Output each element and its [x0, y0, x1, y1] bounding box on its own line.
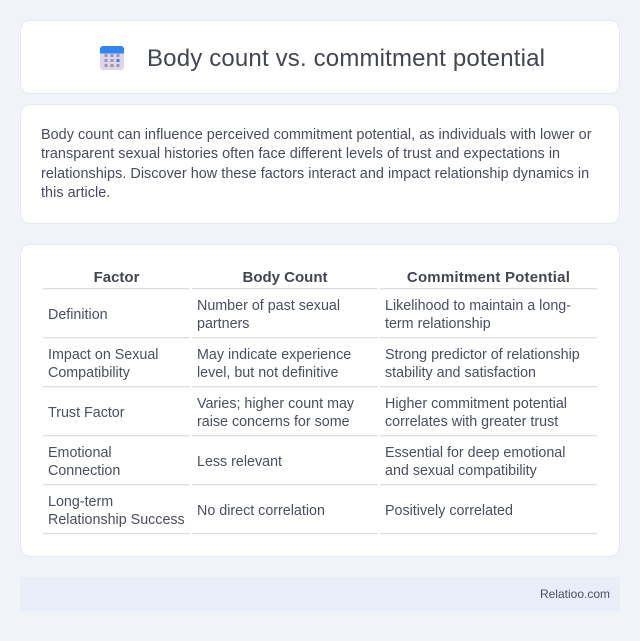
row: Definition: Number of past sexual [197, 298, 340, 314]
intro text [41, 127, 592, 201]
row: Emotional Connection: Essential for deep emotional [385, 445, 565, 461]
row: Impact on Sexual Compatibility: level, but not definitive [197, 365, 338, 381]
row: Trust Factor: raise concerns for some [197, 414, 350, 430]
row: Definition: partners [197, 316, 249, 332]
panel: intro: this article. [41, 185, 110, 201]
row: Definition: Definition [48, 307, 108, 323]
row: Long-term Relationship Success: No direct correlation [197, 503, 325, 519]
header: Body Count: Body Count [242, 269, 327, 286]
panel: comparison table [20, 244, 620, 557]
row: Trust Factor: Trust Factor [48, 405, 125, 421]
row: Emotional Connection: Less relevant [197, 454, 282, 470]
icon: calendar [100, 46, 124, 70]
row: Trust Factor: correlates with greater trust [385, 414, 558, 430]
panel: intro: relationships. Discover how these factors interact and impact relationship dynamics in [41, 166, 589, 182]
footer bar [20, 577, 620, 611]
row: Trust Factor [48, 396, 567, 430]
row: Impact on Sexual Compatibility [48, 347, 580, 381]
row: Trust Factor: Higher commitment potential [385, 396, 567, 412]
row: Long-term Relationship Success: Long-term [48, 494, 113, 510]
row: Impact on Sexual Compatibility: May indicate experience [197, 347, 351, 363]
row: Emotional Connection: and sexual compatibility [385, 463, 537, 479]
panel: intro: transparent sexual histories often face different levels of trust and expectations in [41, 146, 560, 162]
header: Factor: Factor [94, 269, 139, 286]
row: Definition: Likelihood to maintain a long- [385, 298, 571, 314]
panel: title card [20, 20, 620, 94]
panel: intro: Body count can influence perceived commitment potential, as individuals with lower or [41, 127, 592, 143]
row: Emotional Connection [48, 445, 565, 479]
row: Impact on Sexual Compatibility: Impact on Sexual [48, 347, 158, 363]
title: Body count vs. commitment potential [147, 45, 545, 72]
footer text: Relatioo.com [540, 587, 610, 601]
row: Definition [48, 298, 571, 332]
row: Impact on Sexual Compatibility: stability and satisfaction [385, 365, 536, 381]
row: Long-term Relationship Success [48, 494, 513, 528]
header: Commitment Potential: Commitment Potential [407, 269, 570, 286]
row: Impact on Sexual Compatibility: Compatibility [48, 365, 130, 381]
row: Definition: term relationship [385, 316, 491, 332]
row: Trust Factor: Varies; higher count may [197, 396, 354, 412]
row: Long-term Relationship Success: Relationship Success [48, 512, 185, 528]
row: Impact on Sexual Compatibility: Strong predictor of relationship [385, 347, 580, 363]
panel: intro [20, 104, 620, 224]
row: Emotional Connection: Emotional [48, 445, 112, 461]
row: Long-term Relationship Success: Positively correlated [385, 503, 513, 519]
row: Emotional Connection: Connection [48, 463, 120, 479]
